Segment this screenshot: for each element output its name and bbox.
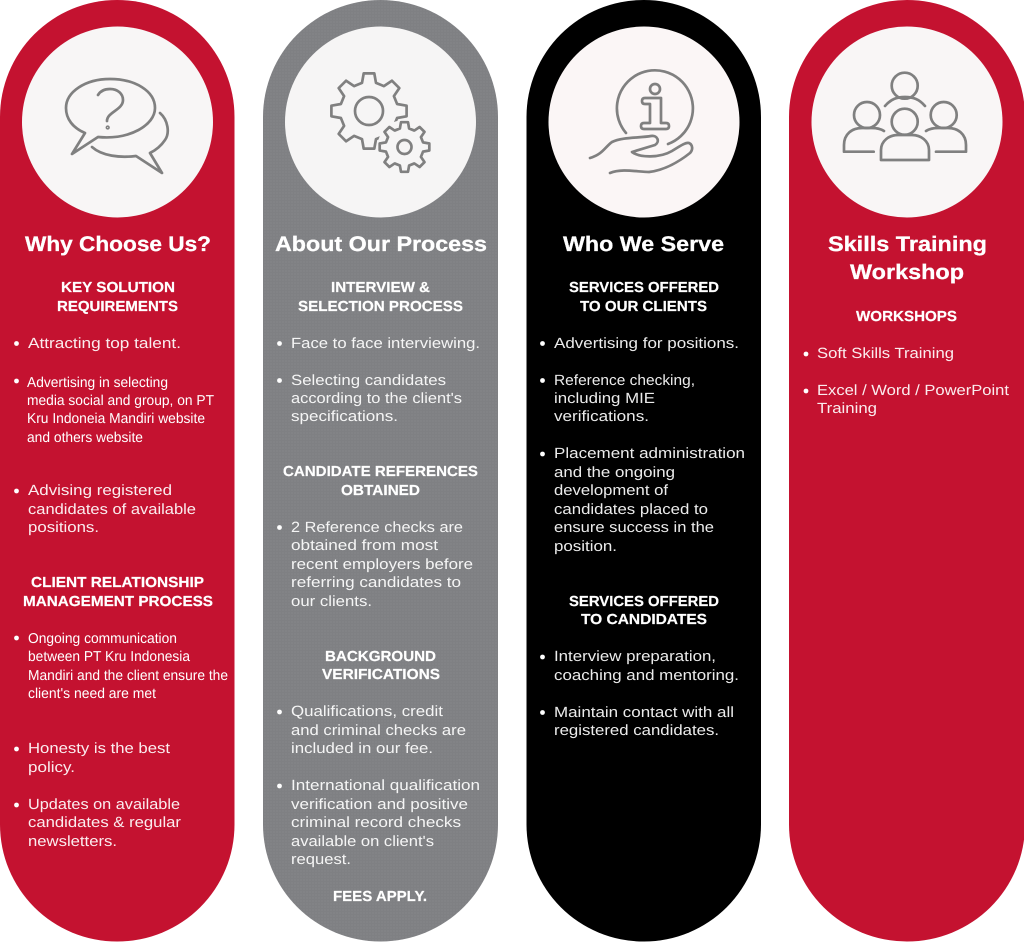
bullet: advertising bbox=[14, 375, 214, 446]
icon circle bbox=[812, 26, 1002, 218]
subheading: client relationship: CLIENT RELATIONSHIP bbox=[31, 575, 204, 591]
subheading: key solution requirements: KEY SOLUTION bbox=[61, 280, 175, 296]
bullet: reference checks: recent employers before bbox=[291, 557, 473, 573]
panel: about our process bbox=[263, 0, 498, 942]
panel: who we serve bbox=[526, 0, 761, 942]
icon circle bbox=[548, 26, 740, 218]
heading: about our process: About Our Process bbox=[275, 233, 487, 256]
bullet: advertising: and others website bbox=[27, 430, 143, 446]
panel: why choose us bbox=[0, 0, 234, 942]
subheading: background verifications bbox=[322, 649, 440, 683]
pill background bbox=[789, 0, 1024, 942]
bullet: international qualification: available on client's bbox=[291, 834, 434, 850]
bullet: selecting candidates bbox=[277, 373, 462, 425]
bullet: honesty bbox=[14, 741, 170, 776]
bullet: advertising: Advertising in selecting bbox=[27, 375, 168, 391]
note: fees apply: FEES APPLY. bbox=[333, 889, 427, 905]
subheading: client relationship: MANAGEMENT PROCESS bbox=[23, 594, 213, 610]
subheading: services to candidates bbox=[569, 594, 719, 628]
heading: who we serve: Who We Serve bbox=[563, 233, 724, 256]
subheading: candidate references: OBTAINED bbox=[341, 483, 420, 499]
subheading: interview and selection: SELECTION PROCESS bbox=[298, 299, 463, 315]
subheading: candidate references bbox=[283, 464, 478, 499]
bullet: reference checking: including MIE bbox=[554, 391, 655, 407]
heading: why choose us: Why Choose Us? bbox=[25, 233, 211, 256]
icon: gears bbox=[331, 73, 432, 174]
bullet: updates: candidates & regular bbox=[28, 815, 181, 831]
bullet: qualifications bbox=[277, 704, 466, 757]
bullet: selecting candidates: according to the client's bbox=[291, 391, 462, 407]
bullet: reference checking: verifications. bbox=[554, 409, 649, 425]
bullet: advising candidates: positions. bbox=[28, 520, 99, 536]
subheading: key solution requirements bbox=[57, 280, 178, 315]
bullet: office training: Excel / Word / PowerPoint bbox=[817, 383, 1009, 399]
panel: skills training workshop bbox=[789, 0, 1024, 942]
bullet: ongoing communication: between PT Kru Indonesia bbox=[28, 649, 190, 665]
bullet: maintain contact: registered candidates. bbox=[554, 723, 719, 739]
bullet: advertising: Kru Indoneia Mandiri website bbox=[27, 411, 205, 427]
subheading: client relationship bbox=[23, 575, 213, 610]
bullet: updates bbox=[14, 797, 181, 850]
bullet: qualifications: Qualifications, credit bbox=[291, 704, 443, 720]
bullet: international qualification: request. bbox=[291, 852, 351, 868]
bullet: attracting top talent: Attracting top talent. bbox=[28, 336, 181, 352]
bullet: ongoing communication bbox=[14, 631, 228, 702]
icon: speech bubbles with question mark bbox=[66, 79, 168, 173]
bullet: selecting candidates: Selecting candidates bbox=[291, 373, 446, 389]
bullet: ongoing communication: Ongoing communication bbox=[28, 631, 177, 647]
icon: hand holding info bbox=[590, 70, 693, 173]
bullet: ongoing communication: Mandiri and the client ensure the bbox=[28, 668, 228, 684]
subheading: interview and selection bbox=[298, 280, 463, 315]
pill background bbox=[0, 0, 234, 942]
bullet: maintain contact: Maintain contact with all bbox=[554, 705, 734, 721]
subheading: background verifications: BACKGROUND bbox=[325, 649, 436, 665]
subheading: interview and selection: INTERVIEW & bbox=[331, 280, 431, 296]
bullet: updates: Updates on available bbox=[28, 797, 180, 813]
bullet: international qualification: verification and positive bbox=[291, 797, 468, 813]
bullet: interview preparation bbox=[540, 649, 739, 684]
bullet: updates: newsletters. bbox=[28, 834, 117, 850]
subheading: services to clients: TO OUR CLIENTS bbox=[580, 299, 707, 315]
subheading: key solution requirements: REQUIREMENTS bbox=[57, 299, 178, 315]
bullet: reference checks: our clients. bbox=[291, 594, 372, 610]
bullet: advising candidates: Advising registered bbox=[28, 483, 172, 499]
subheading: services to candidates: SERVICES OFFERED bbox=[569, 594, 719, 610]
bullet: international qualification: International qualification bbox=[291, 778, 480, 794]
bullet: office training: Training bbox=[817, 401, 877, 417]
bullet: maintain contact bbox=[540, 705, 734, 739]
bullet: placement administration: position. bbox=[554, 539, 617, 555]
bullet: placement administration: ensure success in the bbox=[554, 520, 714, 536]
subheading: candidate references: CANDIDATE REFERENCES bbox=[283, 464, 478, 480]
subheading: services to candidates: TO CANDIDATES bbox=[581, 612, 707, 628]
bullet: placement administration: candidates placed to bbox=[554, 502, 708, 518]
bullet: placement administration: Placement administration bbox=[554, 446, 745, 462]
icon circle bbox=[22, 26, 213, 218]
bullet: advising candidates: candidates of available bbox=[28, 502, 196, 518]
bullet: reference checks bbox=[277, 520, 473, 610]
bullet: placement administration bbox=[540, 446, 745, 555]
bullet: office training bbox=[804, 383, 1009, 417]
bullet: advertising for positions: Advertising for positions. bbox=[554, 336, 739, 352]
bullet: selecting candidates: specifications. bbox=[291, 409, 398, 425]
bullet: international qualification: criminal record checks bbox=[291, 815, 461, 831]
bullet: interview preparation: Interview preparation, bbox=[554, 649, 716, 665]
bullet: international qualification bbox=[277, 778, 480, 868]
bullet: placement administration: development of bbox=[554, 483, 669, 499]
icon circle bbox=[285, 26, 476, 218]
bullet: ongoing communication: client's need are met bbox=[28, 686, 156, 702]
pill background bbox=[263, 0, 498, 942]
bullet: reference checking bbox=[540, 373, 695, 425]
bullet: reference checks: obtained from most bbox=[291, 538, 438, 554]
bullet: qualifications: included in our fee. bbox=[291, 741, 433, 757]
heading: skills training workshop: Workshop bbox=[850, 261, 964, 284]
bullet: reference checks: referring candidates to bbox=[291, 575, 461, 591]
bullet: honesty: Honesty is the best bbox=[28, 741, 170, 757]
subheading: services to clients: SERVICES OFFERED bbox=[569, 280, 719, 296]
bullet: honesty: policy. bbox=[28, 760, 75, 776]
subheading: services to clients bbox=[569, 280, 719, 315]
bullet: interview preparation: coaching and mentoring. bbox=[554, 668, 739, 684]
bullet: placement administration: and the ongoing bbox=[554, 465, 675, 481]
heading: skills training workshop bbox=[828, 233, 987, 284]
bullet: reference checking: Reference checking, bbox=[554, 373, 695, 389]
bullet: soft skills training: Soft Skills Training bbox=[817, 346, 954, 362]
subheading: workshops: WORKSHOPS bbox=[856, 309, 957, 325]
bullet: reference checks: 2 Reference checks are bbox=[291, 520, 463, 536]
bullet: advising candidates bbox=[14, 483, 196, 536]
bullet: qualifications: and criminal checks are bbox=[291, 723, 466, 739]
heading: skills training workshop: Skills Training bbox=[828, 233, 987, 256]
icon: group of people bbox=[844, 73, 966, 160]
bullet: advertising: media social and group, on PT bbox=[27, 393, 214, 409]
subheading: background verifications: VERIFICATIONS bbox=[322, 667, 440, 683]
pill background bbox=[526, 0, 761, 942]
bullet: face to face: Face to face interviewing. bbox=[291, 336, 480, 352]
